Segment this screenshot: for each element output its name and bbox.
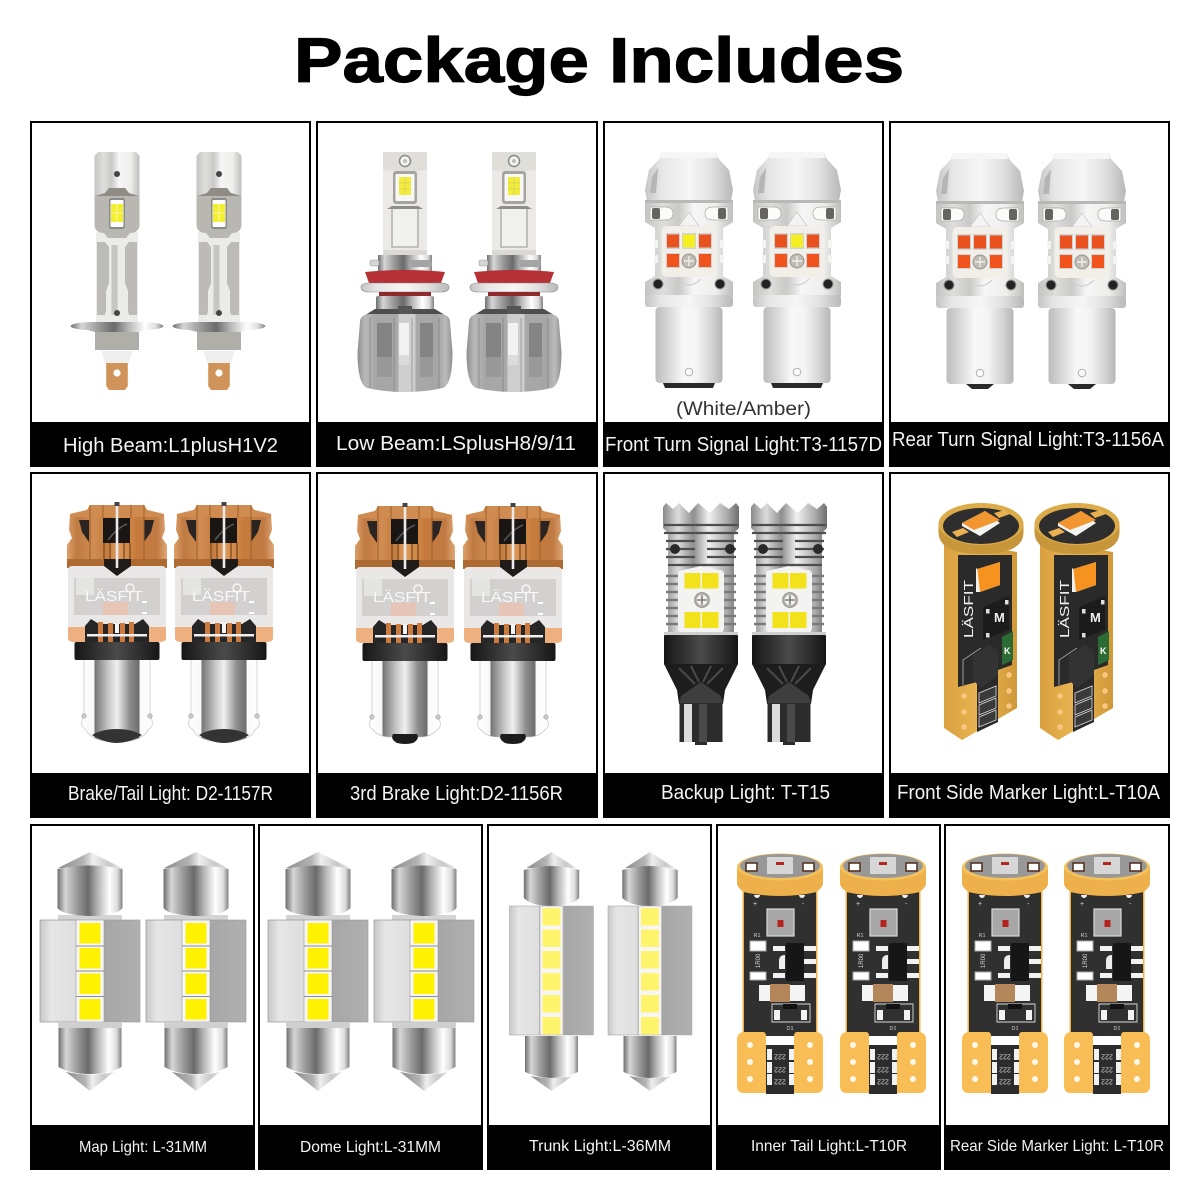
caption: front turn signal xyxy=(603,422,884,467)
caption text: map light: Map Light: L-31MM xyxy=(79,1139,207,1156)
bulb: T3-1157D left xyxy=(645,152,733,388)
bulb: H8 right xyxy=(466,152,562,392)
caption: brake tail light xyxy=(30,773,311,818)
bulb: T10R right xyxy=(1064,854,1150,1094)
bulb: T15 left xyxy=(663,503,739,745)
caption text: brake tail light: Brake/Tail Light: D2-1157R xyxy=(68,782,273,805)
bulb: H1 right xyxy=(172,152,266,390)
panel: low beam xyxy=(316,122,598,467)
bulb: T3-1156A left xyxy=(936,153,1024,389)
caption: high beam xyxy=(30,422,311,467)
caption text: dome light: Dome Light:L-31MM xyxy=(300,1139,441,1156)
bulb: T15 right xyxy=(751,503,827,745)
caption: inner tail light xyxy=(716,1125,941,1170)
caption text: high beam: High Beam:L1plusH1V2 xyxy=(63,434,278,457)
bulb: D2-1157R left: LÄSFIT xyxy=(85,588,143,605)
bulb: 31mm right xyxy=(374,852,474,1091)
panel: rear turn signal xyxy=(889,122,1170,467)
note: white amber: (White/Amber) xyxy=(676,398,811,420)
bulb: T10R left xyxy=(962,854,1048,1094)
bulb: D2-1157R right xyxy=(174,502,274,743)
bulb: H1 left xyxy=(70,152,164,390)
bulb: T10A left xyxy=(938,503,1024,740)
bulb: D2-1156R right xyxy=(463,503,563,744)
bulb: T10R left xyxy=(737,854,823,1094)
caption: third brake light xyxy=(316,773,598,818)
caption: dome light xyxy=(258,1125,483,1170)
caption: map light xyxy=(30,1125,255,1170)
caption: backup light xyxy=(603,773,884,818)
caption: low beam xyxy=(316,422,598,467)
bulb: D2-1156R right: LÄSFIT xyxy=(481,589,539,606)
title: Package Includes xyxy=(294,26,904,96)
panel: rear side marker xyxy=(944,825,1170,1170)
panel: front side marker xyxy=(889,473,1170,818)
bulb: D2-1157R left xyxy=(67,502,167,743)
bulb: 36mm right xyxy=(608,852,692,1091)
panel: brake tail light xyxy=(30,473,311,818)
bulb: 31mm left xyxy=(40,852,140,1091)
panel: backup light xyxy=(603,473,884,818)
bulb: 36mm left xyxy=(510,852,594,1091)
panel: third brake light xyxy=(316,473,598,818)
caption text: trunk light: Trunk Light:L-36MM xyxy=(529,1138,671,1155)
bulb: D2-1156R left: LÄSFIT xyxy=(373,589,431,606)
caption: trunk light xyxy=(487,1125,712,1170)
bulb: H8 left xyxy=(358,152,452,392)
bulb: T10A right xyxy=(1034,503,1120,740)
panel: front turn signal xyxy=(603,122,884,467)
caption: front side marker xyxy=(889,773,1170,818)
panel: trunk light xyxy=(487,825,712,1170)
caption text: front side marker: Front Side Marker Light:L-T10A xyxy=(897,781,1160,804)
bulb: D2-1157R right: LÄSFIT xyxy=(192,588,250,605)
caption text: third brake light: 3rd Brake Light:D2-1156R xyxy=(350,782,563,805)
bulb: T10R right xyxy=(840,854,926,1094)
panel: inner tail light xyxy=(716,825,941,1170)
caption text: front turn signal: Front Turn Signal Light:T3-1157D xyxy=(605,433,882,456)
caption text: rear side marker: Rear Side Marker Light: L-T10R xyxy=(950,1138,1164,1155)
caption text: low beam: Low Beam:LSplusH8/9/11 xyxy=(336,432,576,455)
bulb: D2-1156R left xyxy=(355,503,455,744)
panel: map light xyxy=(30,825,255,1170)
bulb: T3-1157D right xyxy=(753,152,841,388)
panel: dome light xyxy=(258,825,483,1170)
bulb: T3-1156A right xyxy=(1038,153,1126,389)
caption: rear side marker xyxy=(944,1125,1170,1170)
panel: high beam xyxy=(30,122,311,467)
bulb: 31mm right xyxy=(146,852,246,1091)
caption text: backup light: Backup Light: T-T15 xyxy=(661,781,830,804)
caption: rear turn signal xyxy=(889,422,1170,467)
caption text: rear turn signal: Rear Turn Signal Light:T3-1156A xyxy=(892,428,1164,451)
caption text: inner tail light: Inner Tail Light:L-T10R xyxy=(751,1138,907,1155)
bulb: 31mm left xyxy=(268,852,368,1091)
